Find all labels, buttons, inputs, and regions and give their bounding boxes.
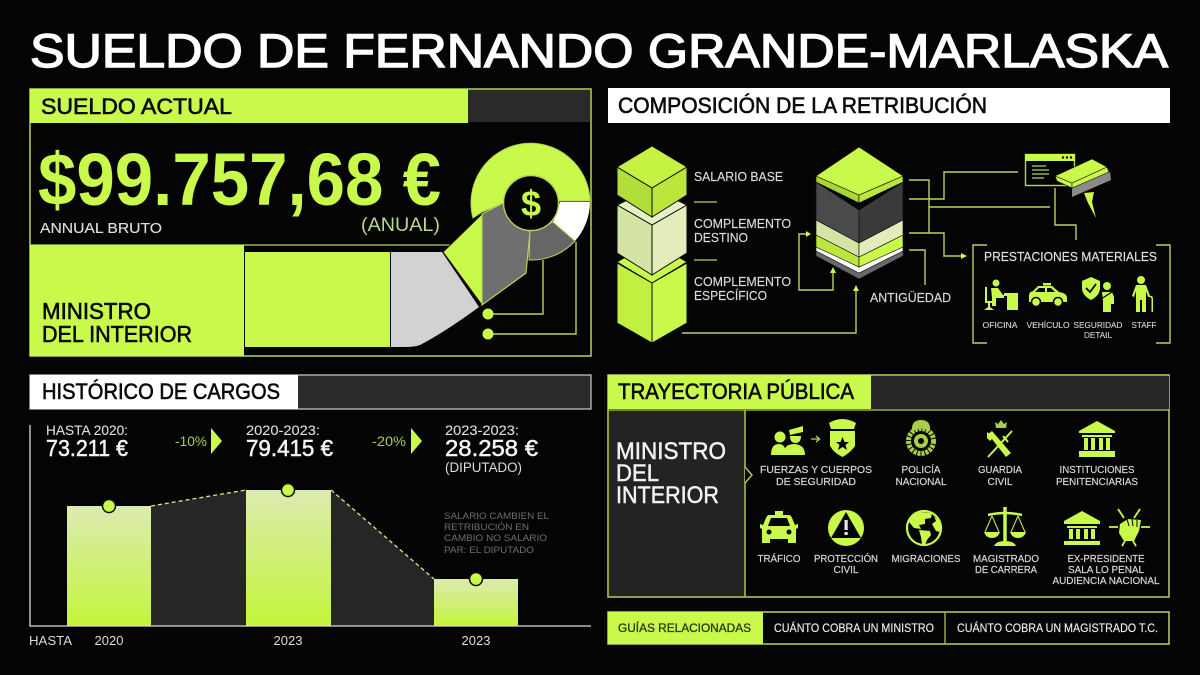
label: fuerzas y cuerpos: FUERZAS Y CUERPOS xyxy=(760,464,872,476)
side block: ministro del interior: MINISTRO xyxy=(616,438,726,465)
icon: seguridad xyxy=(1082,277,1114,312)
label: ex-presidente xyxy=(1052,553,1160,587)
panel: guías relacionadas xyxy=(608,612,1169,644)
layered salary stack xyxy=(816,147,903,279)
stat: 2020-2023 xyxy=(246,422,333,461)
anual label: (ANUAL) xyxy=(361,215,440,236)
panel: prestaciones materiales xyxy=(973,245,1170,343)
label: ex-presidente: EX-PRESIDENTE xyxy=(1068,553,1144,565)
label: oficina: OFICINA xyxy=(982,320,1018,330)
label: protección civil: PROTECCIÓN xyxy=(814,552,878,565)
axis labels: HASTA xyxy=(29,633,72,648)
change arrow: -10%: -10% xyxy=(175,434,207,449)
icon: guardia civil xyxy=(987,420,1012,457)
label: seguridad detail: SEGURIDAD xyxy=(1074,320,1122,330)
header: sueldo actual xyxy=(30,89,590,123)
stat: hasta 2020 xyxy=(46,422,128,461)
button: guías relacionadas xyxy=(608,612,763,644)
change arrow: -20%: -20% xyxy=(372,434,406,449)
header: composición xyxy=(608,88,1170,123)
donut chart with dollar icon: $ xyxy=(521,183,541,224)
note text: RETRIBUCIÓN EN xyxy=(444,522,529,533)
label: protección civil xyxy=(814,552,878,576)
label: policía nacional xyxy=(896,463,947,488)
stat: 2023-2023 diputado: 2023-2023: xyxy=(445,422,519,438)
label: magistrado de carrera: MAGISTRADO xyxy=(973,553,1039,565)
label: ex-presidente: AUDIENCIA NACIONAL xyxy=(1052,575,1160,587)
role block: ministro del interior xyxy=(30,245,244,356)
button: guías relacionadas: GUÍAS RELACIONADAS xyxy=(618,622,751,635)
label: ex-presidente: SALA LO PENAL xyxy=(1068,564,1144,576)
label: complemento destino: COMPLEMENTO xyxy=(694,217,791,231)
header: trayectoria xyxy=(608,375,1169,410)
label: complemento específico: COMPLEMENTO xyxy=(694,275,791,289)
link: cuánto cobra un magistrado: CUÁNTO COBRA UN MAGISTRADO T.C. xyxy=(957,622,1158,635)
stat: hasta 2020: 73.211 € xyxy=(46,435,128,461)
icon: warning xyxy=(828,510,864,546)
header: histórico xyxy=(30,375,591,409)
icon: gavel-like tool xyxy=(1055,159,1111,218)
header: composición: COMPOSICIÓN DE LA RETRIBUCIÓN xyxy=(618,93,987,118)
label: magistrado de carrera: DE CARRERA xyxy=(975,564,1037,576)
stacked cubes xyxy=(617,146,687,343)
axis labels: 2023 xyxy=(274,633,302,648)
stat: 2020-2023: 2020-2023: xyxy=(246,422,320,438)
icon: people to badge xyxy=(771,419,856,457)
side block: ministro del interior xyxy=(609,410,752,597)
stat: 2023-2023 diputado: (DIPUTADO) xyxy=(445,460,522,475)
label: complemento específico xyxy=(694,275,791,303)
icon: instituciones building xyxy=(1079,421,1115,457)
label: instituciones penitenciarias: PENITENCIARIAS xyxy=(1056,476,1138,488)
donut chart with dollar icon xyxy=(471,143,590,260)
label: tráfico: TRÁFICO xyxy=(758,552,800,565)
label: policía nacional: NACIONAL xyxy=(896,476,947,488)
icon: vehículo xyxy=(1029,283,1067,306)
panel: histórico de cargos xyxy=(29,375,591,648)
legend connectors xyxy=(482,242,576,340)
flow band chart xyxy=(245,203,530,347)
stat: 2023-2023 diputado xyxy=(445,422,538,475)
icon: oficina xyxy=(984,280,1018,310)
label: fuerzas y cuerpos xyxy=(760,464,872,488)
panel: composición de la retribución xyxy=(608,88,1170,343)
axis labels: 2020 xyxy=(95,633,123,648)
side block: ministro del interior: INTERIOR xyxy=(616,482,719,509)
label: magistrado de carrera xyxy=(973,553,1039,576)
label: policía nacional: POLICÍA xyxy=(902,463,940,476)
note text: SALARIO CAMBIEN EL xyxy=(444,511,549,522)
icon: court building xyxy=(1064,511,1100,545)
label: seguridad detail: DETAIL xyxy=(1084,330,1112,340)
icon: staff xyxy=(1132,276,1153,312)
label: migraciones: MIGRACIONES xyxy=(892,553,960,565)
label: vehículo: VEHÍCULO xyxy=(1026,320,1070,330)
header: histórico: HISTÓRICO DE CARGOS xyxy=(42,379,280,404)
panel frame xyxy=(608,375,1169,597)
icon: globe xyxy=(907,511,941,545)
icon: policía crest xyxy=(908,420,934,454)
label: guardia civil xyxy=(978,464,1022,488)
label: salario base: SALARIO BASE xyxy=(694,170,783,184)
label: instituciones penitenciarias: INSTITUCIONES xyxy=(1060,464,1134,476)
frame xyxy=(608,612,1169,644)
panel: prestaciones materiales: PRESTACIONES MATERIALES xyxy=(984,249,1157,264)
change arrow: -10% xyxy=(175,428,222,454)
role block: ministro del interior: MINISTRO xyxy=(42,298,151,324)
stat: 2023-2023 diputado: 28.258 € xyxy=(445,435,538,461)
annual bruto label: ANNUAL BRUTO xyxy=(40,221,162,237)
panel frame xyxy=(30,89,591,356)
axis labels: 2023 xyxy=(462,633,490,648)
label: guardia civil: GUARDIA xyxy=(978,464,1022,476)
note text: PAR: EL DIPUTADO xyxy=(444,545,534,556)
title: SUELDO DE FERNANDO GRANDE-MARLASKA xyxy=(30,24,1169,77)
label: antigüedad: ANTIGÜEDAD xyxy=(870,291,951,305)
header: trayectoria: TRAYECTORIA PÚBLICA xyxy=(618,379,854,404)
icon: scales xyxy=(984,507,1026,546)
bar chart xyxy=(30,425,591,626)
panel: sueldo actual xyxy=(30,89,591,356)
icon: raised fist xyxy=(1109,509,1150,546)
label: complemento específico: ESPECÍFICO xyxy=(694,288,767,303)
note text xyxy=(444,511,549,556)
label: seguridad detail xyxy=(1074,320,1122,340)
label: fuerzas y cuerpos: DE SEGURIDAD xyxy=(776,476,856,488)
label: complemento destino: DESTINO xyxy=(694,231,748,245)
label: instituciones penitenciarias xyxy=(1056,464,1138,488)
label: protección civil: CIVIL xyxy=(834,564,859,576)
role block: ministro del interior: DEL INTERIOR xyxy=(42,321,192,347)
axis labels xyxy=(29,633,490,648)
stat: hasta 2020: HASTA 2020: xyxy=(46,422,128,438)
label: guardia civil: CIVIL xyxy=(988,476,1013,488)
panel: trayectoria pública xyxy=(608,375,1169,597)
salary amount: $99.757,68 € xyxy=(38,138,441,221)
label: complemento destino xyxy=(694,217,791,245)
icon: browser window xyxy=(1025,154,1075,186)
change arrow: -20% xyxy=(372,428,422,454)
stat: 2020-2023: 79.415 € xyxy=(246,435,333,461)
header: sueldo actual: SUELDO ACTUAL xyxy=(41,94,232,119)
side block: ministro del interior: DEL xyxy=(616,460,659,487)
connector lines xyxy=(682,172,1076,333)
link: cuánto cobra un ministro: CUÁNTO COBRA UN MINISTRO xyxy=(774,622,934,635)
note text: CAMBIO NO SALARIO xyxy=(444,533,547,544)
icon: taxi xyxy=(760,511,798,543)
label: staff: STAFF xyxy=(1132,320,1156,330)
